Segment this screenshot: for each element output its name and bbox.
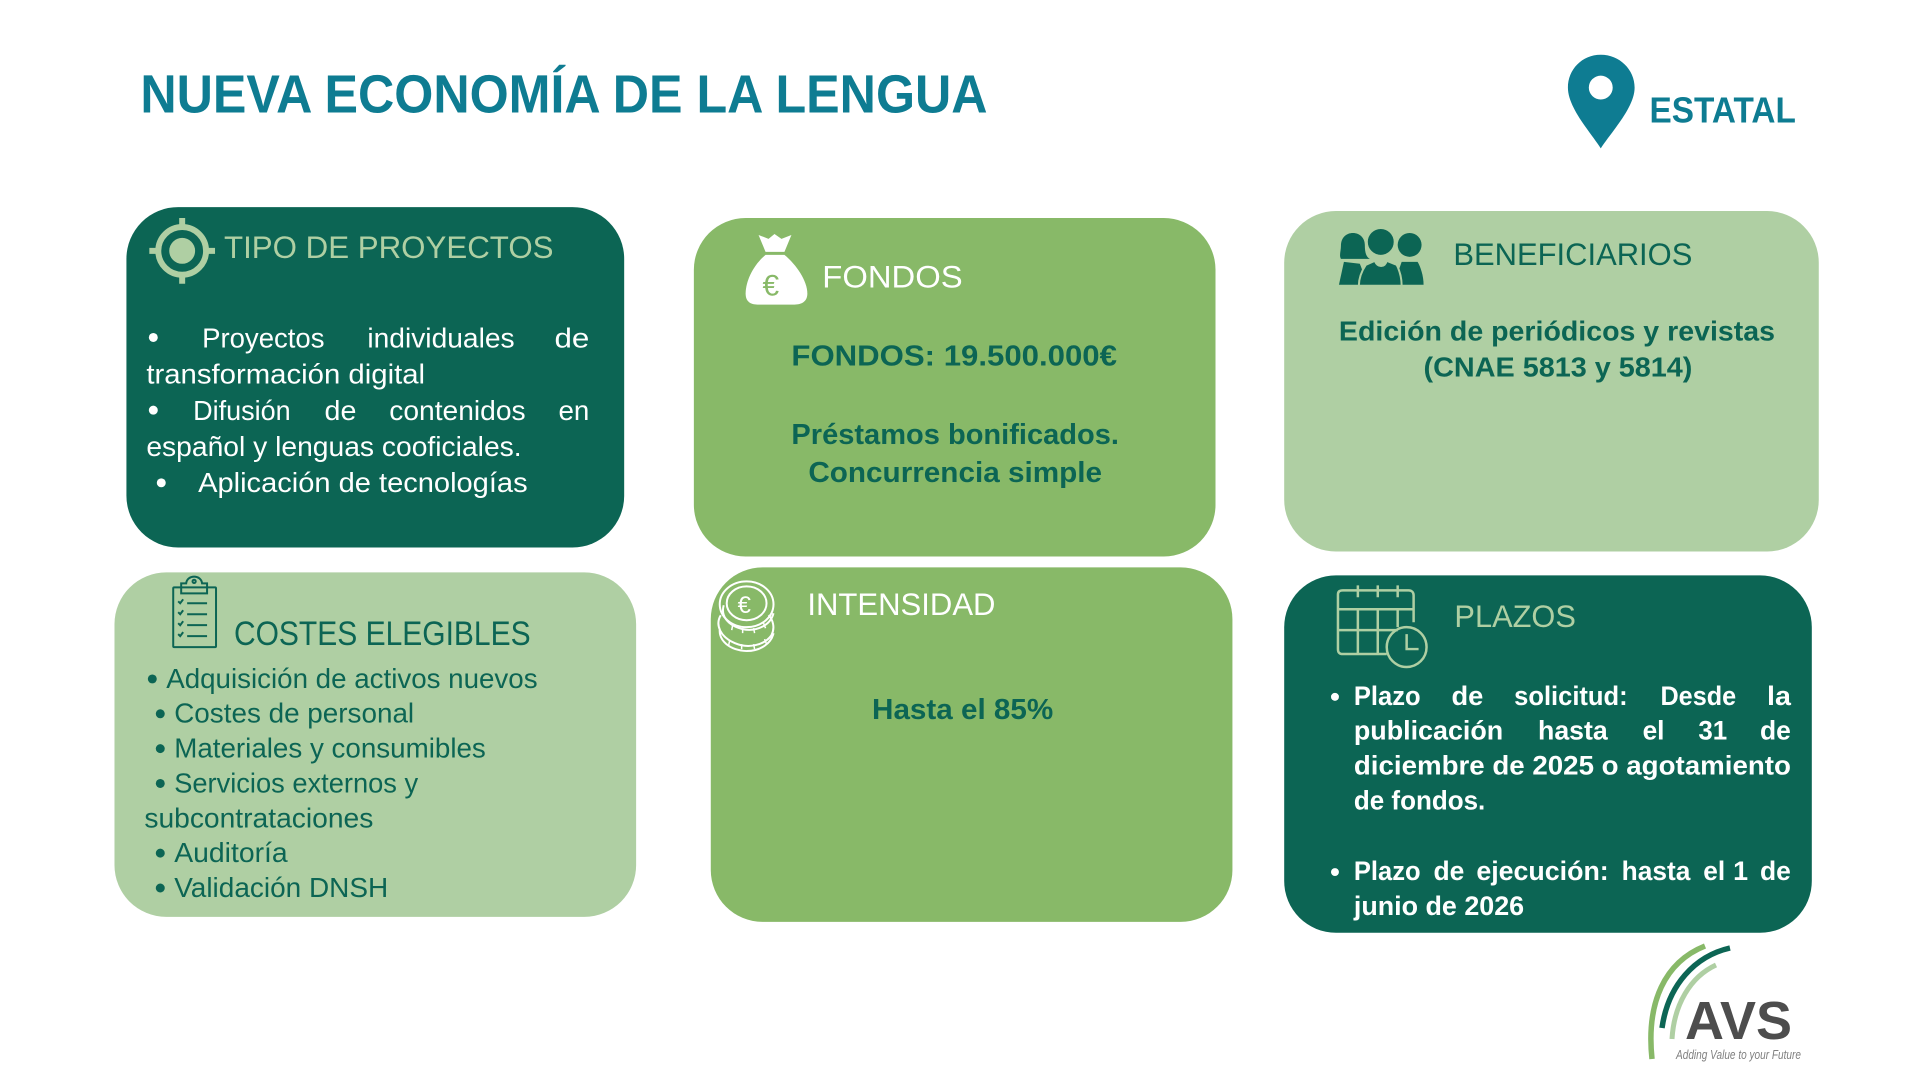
title: NUEVA ECONOMÍA DE LA LENGUA: [140, 64, 988, 124]
scope label: estatal: ESTATAL: [1650, 90, 1796, 130]
list: project types: contenidos: [389, 395, 526, 426]
list: deadlines: el: [1703, 856, 1725, 886]
list: deadlines: de: [1434, 856, 1464, 886]
list: deadlines: Plazo: [1354, 681, 1421, 711]
heading: beneficiarios: BENEFICIARIOS: [1453, 236, 1692, 272]
list: eligible costs: Adquisición de activos nuevos: [166, 663, 538, 694]
list: deadlines: el: [1643, 716, 1664, 746]
text: intensity value: Hasta el 85%: [872, 694, 1053, 726]
logo: AVS: AVS: [1685, 991, 1792, 1051]
icon: people: [1339, 228, 1424, 286]
icon: euro coins: [718, 581, 774, 651]
list: eligible costs: Costes de personal: [174, 698, 414, 729]
list: project types: transformación digital: [146, 358, 425, 389]
list: deadlines: hasta: [1538, 716, 1609, 746]
list: deadlines: 31: [1698, 716, 1727, 746]
text: beneficiary description: Edición de periódicos y revistas: [1339, 315, 1775, 346]
logo: AVS: Adding Value to your Future: [1675, 1048, 1801, 1062]
list: project types: Aplicación de tecnologías: [198, 467, 528, 498]
heading: plazos: PLAZOS: [1454, 598, 1576, 634]
list: deadlines: [1331, 681, 1792, 921]
list: eligible costs: Auditoría: [174, 837, 288, 868]
text: funding type: Préstamos bonificados.: [791, 419, 1119, 451]
list: project types: en: [558, 395, 589, 426]
text: beneficiary description: (CNAE 5813 y 5814): [1424, 351, 1692, 382]
text: beneficiary description: [1339, 315, 1775, 382]
icon: location pin: [1568, 55, 1635, 148]
heading: intensidad: INTENSIDAD: [807, 586, 995, 622]
list: deadlines: publicación: [1354, 716, 1503, 746]
list: deadlines: de: [1760, 716, 1791, 746]
list: eligible costs: Validación DNSH: [174, 872, 388, 903]
list: deadlines: de: [1451, 681, 1483, 711]
icon: target: [149, 218, 215, 284]
panel: plazos: [1284, 575, 1812, 933]
list: project types: Proyectos: [202, 322, 325, 353]
list: deadlines: de fondos.: [1354, 785, 1485, 815]
panel: intensidad: [711, 567, 1232, 922]
list: deadlines: Desde: [1660, 681, 1736, 711]
logo: AVS: [1651, 946, 1801, 1062]
heading: fondos: FONDOS: [822, 259, 963, 295]
panel: costes elegibles: [114, 572, 636, 917]
panel: tipo de proyectos: [126, 207, 624, 548]
list: deadlines: diciembre de 2025 o agotamiento: [1354, 750, 1791, 780]
list: eligible costs: Servicios externos y: [174, 767, 418, 798]
list: eligible costs: Materiales y consumibles: [174, 733, 486, 764]
list: project types: de: [554, 322, 589, 353]
panel: fondos: [694, 218, 1216, 556]
text: funding type: [791, 419, 1119, 489]
list: deadlines: de: [1760, 856, 1791, 886]
list: deadlines: 1: [1733, 856, 1748, 886]
icon: clipboard checklist: [173, 577, 216, 647]
list: deadlines: hasta: [1622, 856, 1691, 886]
icon: euro coins: €: [738, 592, 751, 619]
list: project types: de: [325, 395, 356, 426]
list: project types: español y lenguas cooficiales.: [146, 431, 522, 462]
list: deadlines: solicitud:: [1514, 681, 1628, 711]
text: funding type: Concurrencia simple: [808, 457, 1102, 489]
list: project types: [146, 322, 589, 498]
icon: money bag: [746, 234, 807, 305]
list: eligible costs: subcontrataciones: [144, 802, 373, 833]
list: deadlines: ejecución:: [1476, 856, 1609, 886]
list: deadlines: la: [1767, 681, 1792, 711]
list: project types: individuales: [367, 322, 515, 353]
heading: costes elegibles: COSTES ELEGIBLES: [234, 615, 531, 653]
list: eligible costs: [144, 663, 538, 903]
list: deadlines: Plazo: [1354, 856, 1421, 886]
text: funding amount: FONDOS: 19.500.000€: [791, 340, 1117, 372]
icon: calendar with clock: [1338, 585, 1427, 667]
panel: beneficiarios: [1284, 211, 1819, 552]
icon: money bag: €: [763, 270, 780, 303]
heading: tipo de proyectos: TIPO DE PROYECTOS: [224, 229, 553, 265]
list: deadlines: junio de 2026: [1353, 891, 1524, 921]
list: project types: Difusión: [193, 395, 291, 426]
